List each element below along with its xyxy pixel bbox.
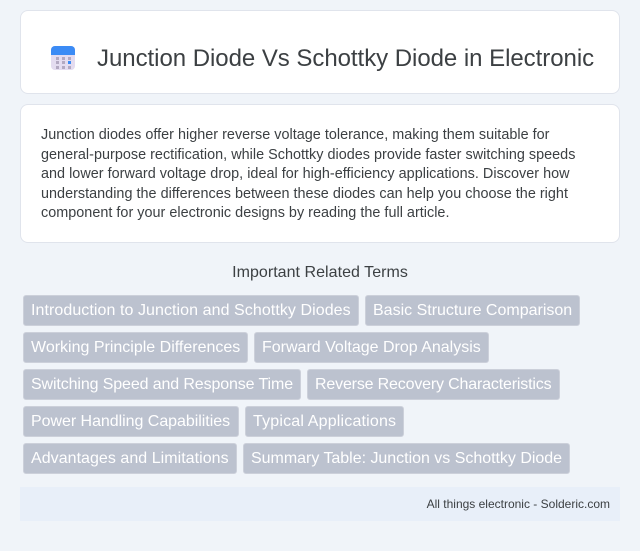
icon: calendar (51, 46, 75, 70)
tag: Reverse Recovery Characteristics (315, 376, 551, 393)
tag (254, 332, 489, 363)
tag (23, 369, 301, 400)
panel: title card (20, 10, 620, 94)
tag: Advantages and Limitations (31, 450, 229, 467)
intro paragraph: Junction diodes offer higher reverse voltage tolerance, making them suitable for (41, 127, 550, 143)
tag (23, 295, 359, 326)
tag: Typical Applications (253, 413, 396, 430)
tag: Basic Structure Comparison (373, 302, 572, 319)
tag: Working Principle Differences (31, 339, 240, 356)
intro paragraph: and lower forward voltage drop, ideal for high-efficiency applications. Discover how (41, 166, 570, 182)
panel: intro text (20, 104, 620, 243)
tag list (23, 295, 580, 474)
tag: Summary Table: Junction vs Schottky Diode (251, 450, 562, 467)
tag: Forward Voltage Drop Analysis (262, 339, 481, 356)
tag (365, 295, 580, 326)
heading: related terms: Important Related Terms (232, 264, 408, 281)
footer text: All things electronic - Solderic.com (427, 497, 610, 511)
tag (245, 406, 404, 437)
tag: Switching Speed and Response Time (31, 376, 293, 393)
title: Junction Diode Vs Schottky Diode in Electronic (97, 45, 594, 72)
intro paragraph: understanding the differences between these diodes can help you choose the right (41, 186, 568, 202)
footer bar (20, 487, 620, 521)
tag (23, 406, 239, 437)
tag (307, 369, 560, 400)
intro paragraph (41, 127, 575, 221)
intro paragraph: general-purpose rectification, while Schottky diodes provide faster switching speeds (41, 146, 575, 162)
intro paragraph: component for your electronic designs by reading the full article. (41, 205, 449, 221)
tag (23, 332, 248, 363)
tag (243, 443, 570, 474)
tag (23, 443, 237, 474)
tag: Power Handling Capabilities (31, 413, 230, 430)
tag: Introduction to Junction and Schottky Diodes (31, 302, 351, 319)
